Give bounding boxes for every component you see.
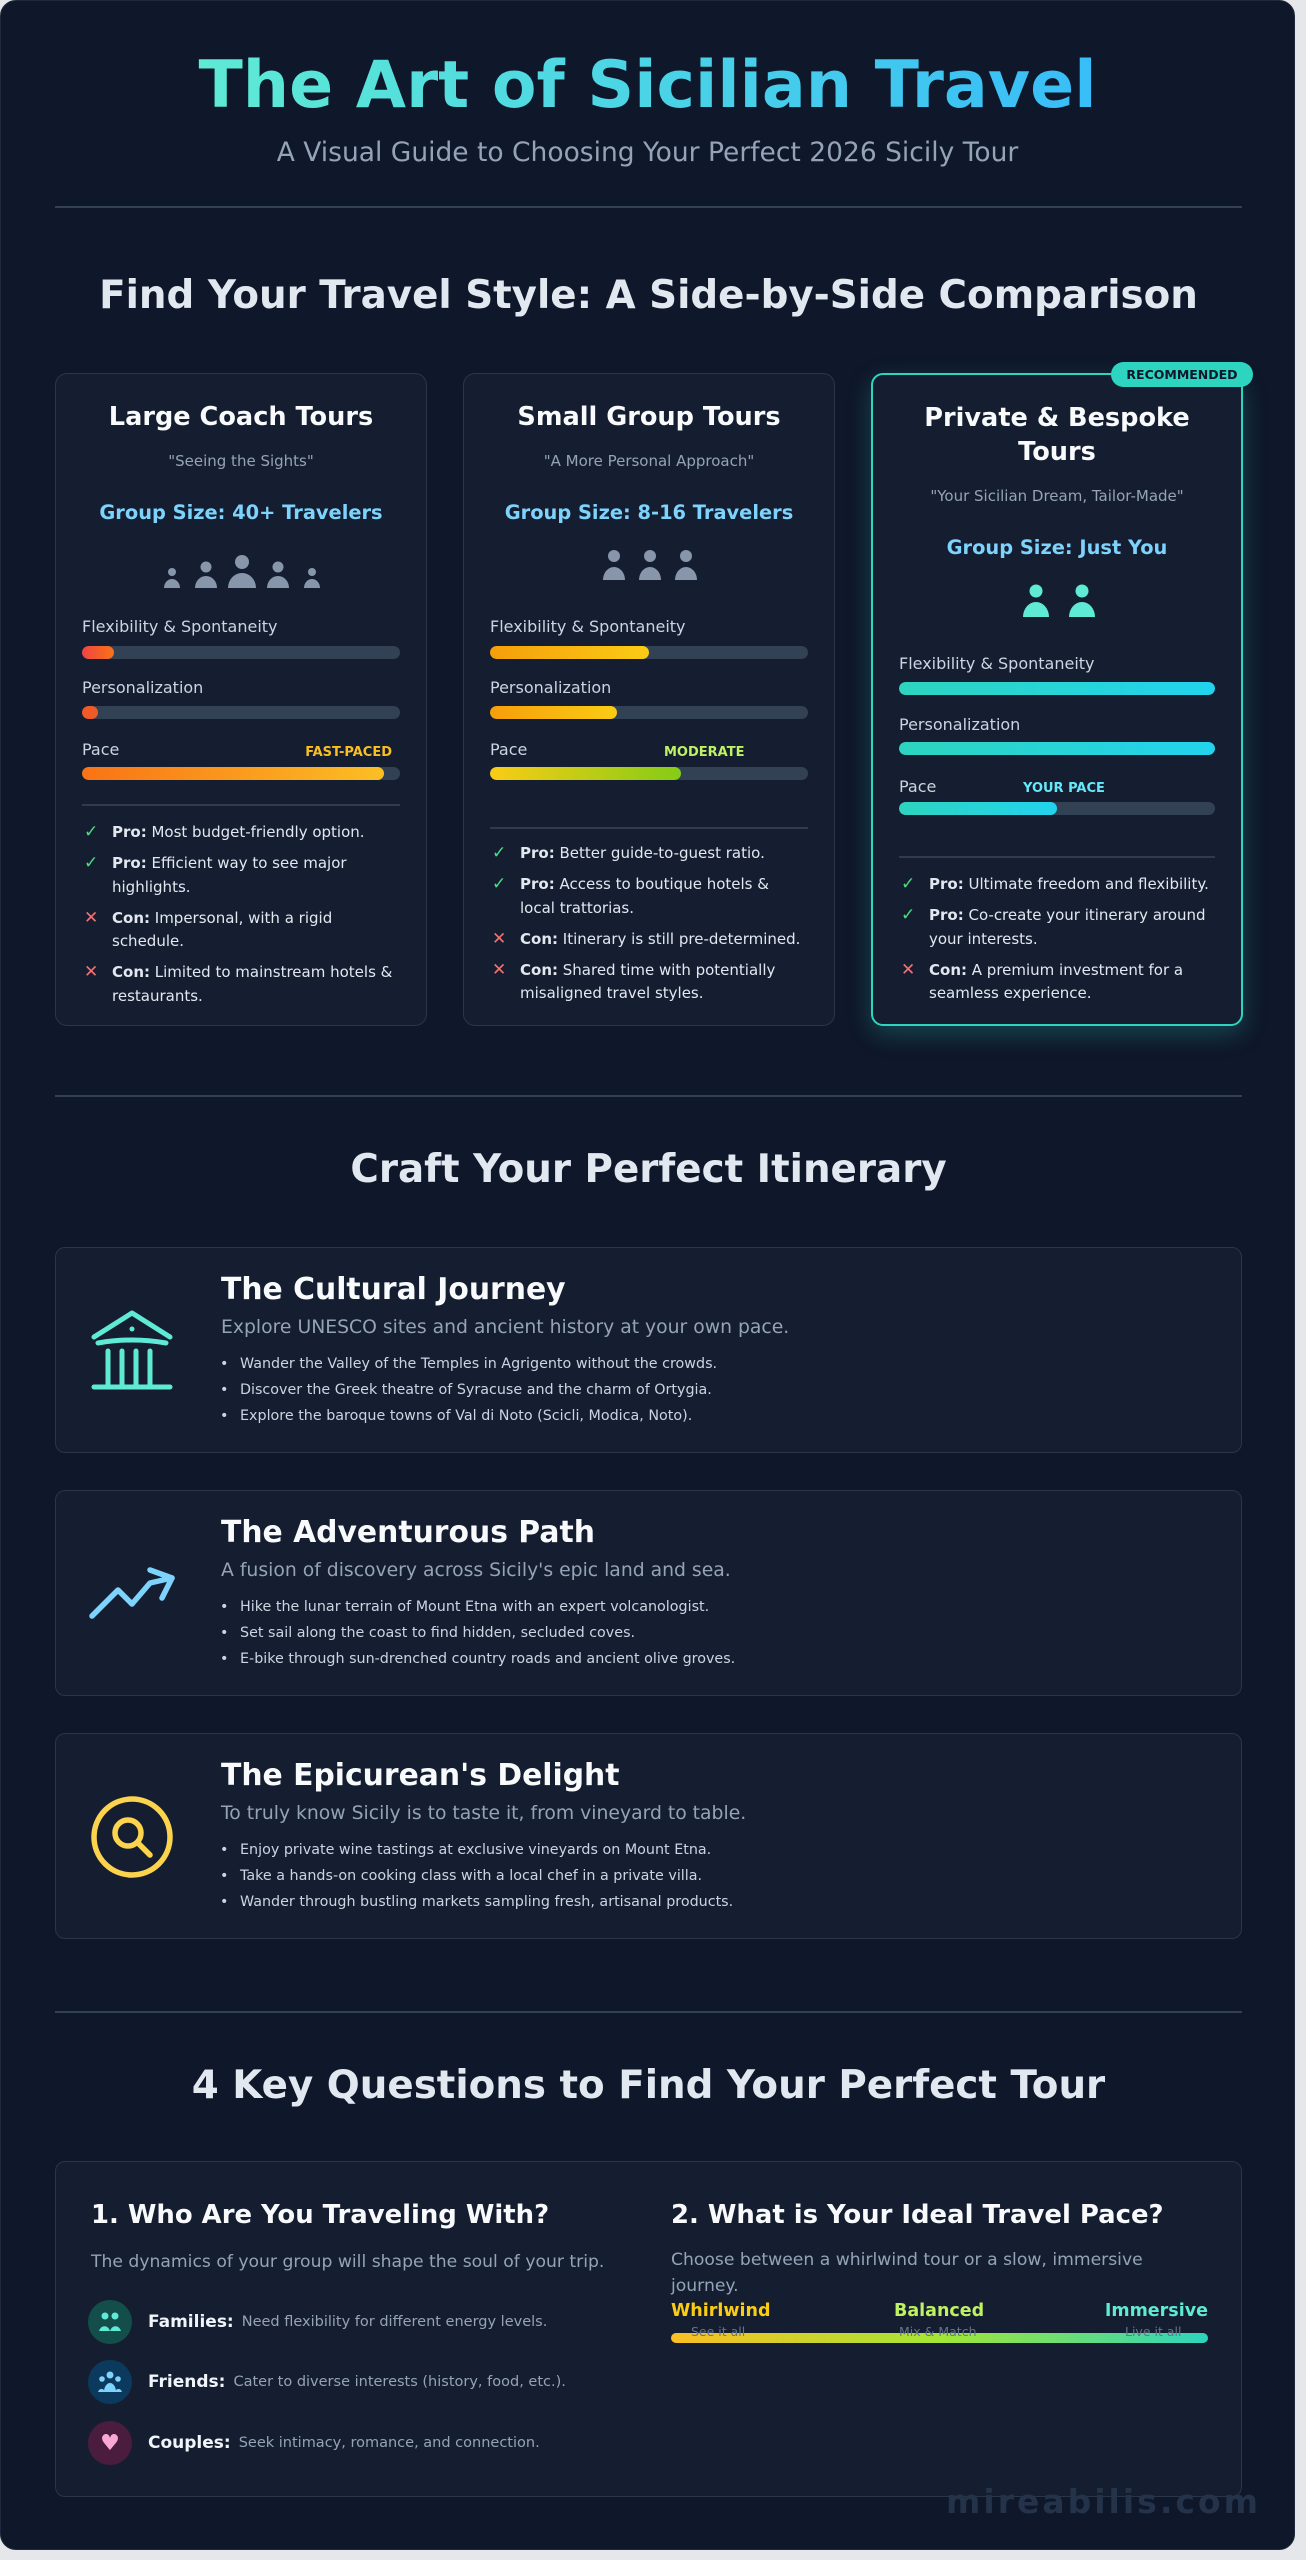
item: couples: ♥ xyxy=(100,2430,120,2456)
pros and cons: ✕ xyxy=(84,908,98,928)
tagline: "A More Personal Approach" xyxy=(544,452,754,470)
pros and cons: ✕ xyxy=(492,960,506,980)
icon: temple xyxy=(92,1310,172,1390)
bullets xyxy=(222,1842,733,1910)
panel: private & bespoke tours xyxy=(871,373,1243,1026)
pros and cons: your interests. xyxy=(929,930,1038,948)
panel: adventurous path xyxy=(55,1490,1242,1696)
question 2 heading: 2. What is Your Ideal Travel Pace? xyxy=(671,2200,1164,2230)
pace scale: Immersive xyxy=(1105,2301,1208,2321)
pros and cons: schedule. xyxy=(112,932,184,950)
metric: flexibility: Flexibility & Spontaneity xyxy=(82,617,278,636)
question 1 description: The dynamics of your group will shape the soul of your trip. xyxy=(91,2252,604,2272)
panel: large coach tours: FAST-PACED xyxy=(305,745,392,760)
pros and cons: Con: A premium investment for a xyxy=(929,960,1183,978)
description: To truly know Sicily is to taste it, from vineyard to table. xyxy=(221,1803,746,1824)
item: friends xyxy=(88,2360,566,2404)
icon: trending arrow xyxy=(89,1567,175,1619)
subtitle: A Visual Guide to Choosing Your Perfect 2026 Sicily Tour xyxy=(277,137,1018,168)
pros and cons: ✓ xyxy=(84,853,98,873)
bullets: E-bike through sun-drenched country roads and ancient olive groves. xyxy=(240,1651,735,1667)
item: families: Need flexibility for different energy levels. xyxy=(242,2314,547,2330)
panel: private & bespoke tours: YOUR PACE xyxy=(1023,781,1105,796)
item: couples xyxy=(88,2421,540,2465)
badge: recommended: RECOMMENDED xyxy=(1126,367,1238,382)
question 2 description: Choose between a whirlwind tour or a slow, immersive journey. xyxy=(671,2250,1143,2296)
pace scale: Live it all xyxy=(1125,2324,1181,2339)
bullets: Explore the baroque towns of Val di Noto (Scicli, Modica, Noto). xyxy=(240,1408,692,1424)
bullets xyxy=(222,1356,717,1424)
panel: small group tours xyxy=(463,373,835,1026)
pros and cons: seamless experience. xyxy=(929,984,1092,1002)
panel: questions xyxy=(55,2161,1242,2497)
panel: large coach tours xyxy=(55,373,427,1026)
panel: cultural journey xyxy=(55,1247,1242,1453)
bullets: Enjoy private wine tastings at exclusive vineyards on Mount Etna. xyxy=(240,1842,711,1858)
item: families: Families: xyxy=(148,2312,234,2332)
heading: key questions: 4 Key Questions to Find Your Perfect Tour xyxy=(192,2063,1105,2108)
pace scale: Whirlwind xyxy=(671,2301,771,2321)
tagline: "Your Sicilian Dream, Tailor-Made" xyxy=(930,487,1184,505)
item: couples: Couples: xyxy=(148,2433,231,2453)
pace scale: Balanced xyxy=(894,2301,984,2321)
metric: pace: Pace xyxy=(82,740,119,759)
metric: flexibility: Flexibility & Spontaneity xyxy=(490,617,686,636)
bullets: Take a hands-on cooking class with a local chef in a private villa. xyxy=(240,1868,702,1884)
tagline: "Seeing the Sights" xyxy=(168,452,314,470)
pros and cons: ✓ xyxy=(492,843,506,863)
bullets: Wander through bustling markets sampling fresh, artisanal products. xyxy=(240,1894,733,1910)
metric: flexibility: Flexibility & Spontaneity xyxy=(899,654,1094,673)
title: The Adventurous Path xyxy=(221,1515,595,1550)
pros and cons xyxy=(901,874,1209,1002)
panel: small group tours: MODERATE xyxy=(664,745,744,760)
pros and cons: Pro: Better guide-to-guest ratio. xyxy=(520,844,765,862)
item: friends: Friends: xyxy=(148,2372,225,2392)
metric: personalization: Personalization xyxy=(899,715,1020,734)
pros and cons: highlights. xyxy=(112,878,191,896)
metric: personalization: Personalization xyxy=(82,678,203,697)
pros and cons xyxy=(492,843,800,1002)
pros and cons: ✓ xyxy=(901,905,915,925)
group size: Group Size: Just You xyxy=(947,536,1167,559)
title: The Cultural Journey xyxy=(221,1272,566,1307)
icon: magnifier xyxy=(91,1796,173,1878)
icon: small group xyxy=(603,550,697,580)
metric: personalization: Personalization xyxy=(490,678,611,697)
item: families xyxy=(88,2300,547,2344)
pace scale: Mix & Match xyxy=(899,2324,976,2339)
metric: pace: Pace xyxy=(899,777,936,796)
pros and cons: Pro: Access to boutique hotels & xyxy=(520,875,769,893)
title: The Epicurean's Delight xyxy=(221,1758,620,1793)
pace scale xyxy=(671,2301,1208,2343)
pros and cons: Con: Itinerary is still pre-determined. xyxy=(520,930,800,948)
heading: comparison: Find Your Travel Style: A Side-by-Side Comparison xyxy=(99,273,1198,318)
pros and cons: ✕ xyxy=(84,962,98,982)
icon: crowd xyxy=(164,555,320,588)
pros and cons: ✕ xyxy=(901,960,915,980)
description: Explore UNESCO sites and ancient history at your own pace. xyxy=(221,1317,789,1338)
pros and cons: Pro: Efficient way to see major xyxy=(112,854,347,872)
card title: Small Group Tours xyxy=(517,402,781,432)
description: A fusion of discovery across Sicily's epic land and sea. xyxy=(221,1560,731,1581)
title: The Art of Sicilian Travel xyxy=(198,48,1097,123)
heading: itinerary: Craft Your Perfect Itinerary xyxy=(350,1147,947,1192)
item: couples: Seek intimacy, romance, and connection. xyxy=(239,2435,540,2451)
group size: Group Size: 40+ Travelers xyxy=(99,501,383,524)
pros and cons: Pro: Most budget-friendly option. xyxy=(112,823,365,841)
pros and cons: local trattorias. xyxy=(520,898,634,916)
pros and cons: ✓ xyxy=(901,874,915,894)
group size: Group Size: 8-16 Travelers xyxy=(505,501,793,524)
icon: couple xyxy=(1023,584,1095,617)
bullets xyxy=(222,1599,735,1667)
panel: epicurean delight xyxy=(55,1733,1242,1939)
badge: recommended xyxy=(1111,362,1253,387)
metric: pace: Pace xyxy=(490,740,527,759)
card title: Large Coach Tours xyxy=(109,402,373,432)
pace scale: See it all xyxy=(691,2324,745,2339)
pros and cons: Con: Limited to mainstream hotels & xyxy=(112,963,392,981)
watermark: mireabilis.com xyxy=(946,2482,1261,2521)
pros and cons: ✓ xyxy=(84,822,98,842)
question 1 heading: 1. Who Are You Traveling With? xyxy=(91,2200,549,2230)
pros and cons: misaligned travel styles. xyxy=(520,984,704,1002)
item: friends: Cater to diverse interests (history, food, etc.). xyxy=(233,2374,566,2390)
pros and cons: restaurants. xyxy=(112,986,203,1004)
pros and cons: Pro: Co-create your itinerary around xyxy=(929,906,1206,924)
pros and cons: ✓ xyxy=(492,874,506,894)
bullets: Discover the Greek theatre of Syracuse and the charm of Ortygia. xyxy=(240,1382,712,1398)
bullets: Hike the lunar terrain of Mount Etna with an expert volcanologist. xyxy=(240,1599,709,1615)
bullets: Wander the Valley of the Temples in Agrigento without the crowds. xyxy=(240,1356,717,1372)
pros and cons: ✕ xyxy=(492,928,506,948)
pros and cons xyxy=(84,822,392,1004)
bullets: Set sail along the coast to find hidden, secluded coves. xyxy=(240,1625,635,1641)
card title: Private & Bespoke Tours xyxy=(924,403,1190,467)
pros and cons: Pro: Ultimate freedom and flexibility. xyxy=(929,875,1209,893)
pros and cons: Con: Impersonal, with a rigid xyxy=(112,908,332,926)
pros and cons: Con: Shared time with potentially xyxy=(520,960,775,978)
